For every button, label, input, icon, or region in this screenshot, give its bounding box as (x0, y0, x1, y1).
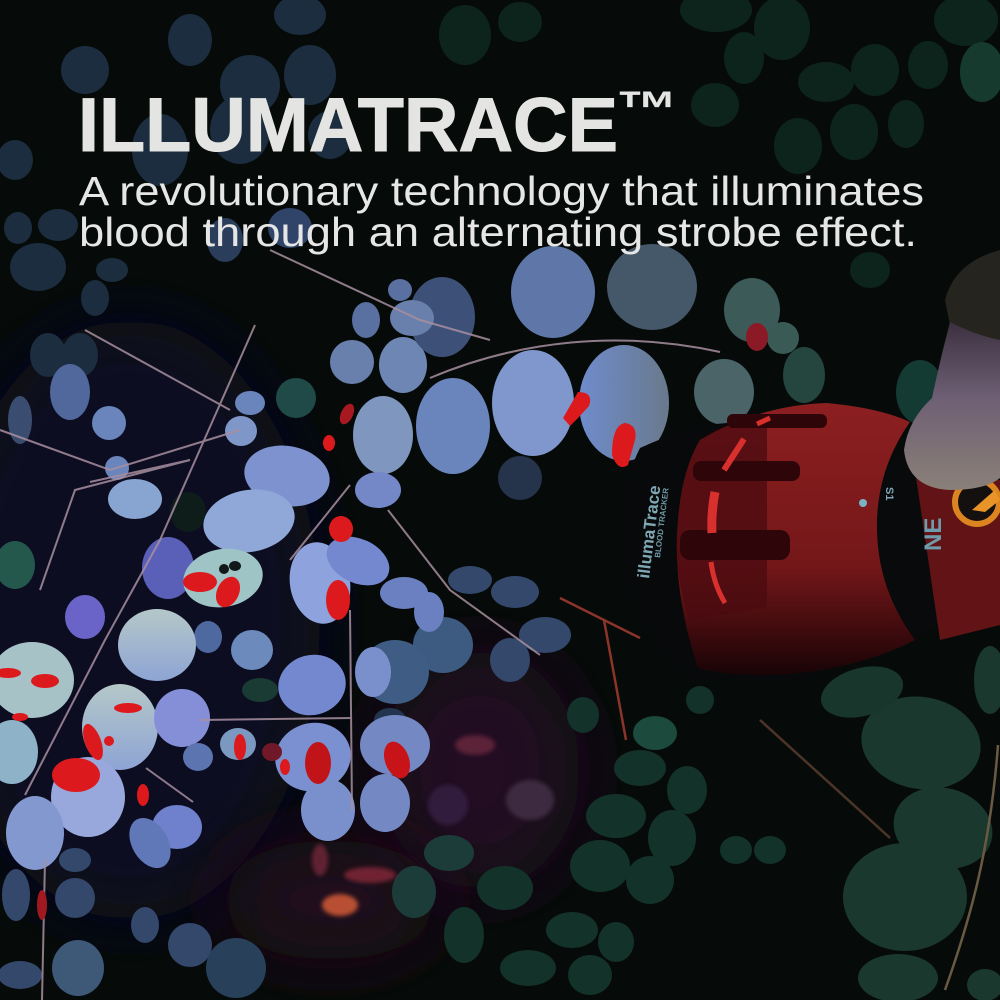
subtitle: A revolutionary technology that illuminates (79, 168, 924, 214)
flashlight: BLOOD TRACKER (653, 487, 671, 558)
dim blue foliage, mid and lower (0, 378, 571, 998)
flashlight labels: illumaTrace (634, 484, 664, 579)
flashlight button (859, 499, 867, 507)
flashlight: NE (920, 518, 947, 551)
camouflage sleeve (945, 250, 1000, 345)
flashlight collar (877, 453, 945, 640)
hand (904, 322, 1000, 490)
large green leaves, lower right (815, 646, 1000, 1000)
title: ILLUMATRACE (78, 83, 618, 168)
flashlight bright stripes (711, 418, 770, 603)
flashlight red drum (677, 403, 915, 675)
flashlight grip recess (676, 415, 767, 620)
red-brown twigs (560, 598, 998, 990)
dark blue foliage behind the title (0, 0, 352, 444)
flashlight grip ribs (680, 414, 827, 560)
subtitle (79, 168, 924, 255)
flashlight bezel (620, 423, 900, 680)
logo badge on handle (955, 480, 1000, 524)
flashlight handle (915, 470, 1000, 640)
title: ™ (616, 81, 678, 137)
dark green foliage, top right (439, 0, 1000, 424)
red blood drops on leaves (0, 323, 768, 920)
grey-green leaves above flashlight (607, 244, 825, 425)
branches (0, 250, 720, 1000)
illuminated blue leaves (0, 246, 669, 875)
flashlight (620, 403, 1000, 680)
pink and orange forest floor (312, 735, 554, 916)
subtitle: blood through an alternating strobe effect. (79, 209, 917, 255)
flashlight: S1 (883, 487, 895, 500)
dark green foliage, lower centre (392, 686, 786, 995)
